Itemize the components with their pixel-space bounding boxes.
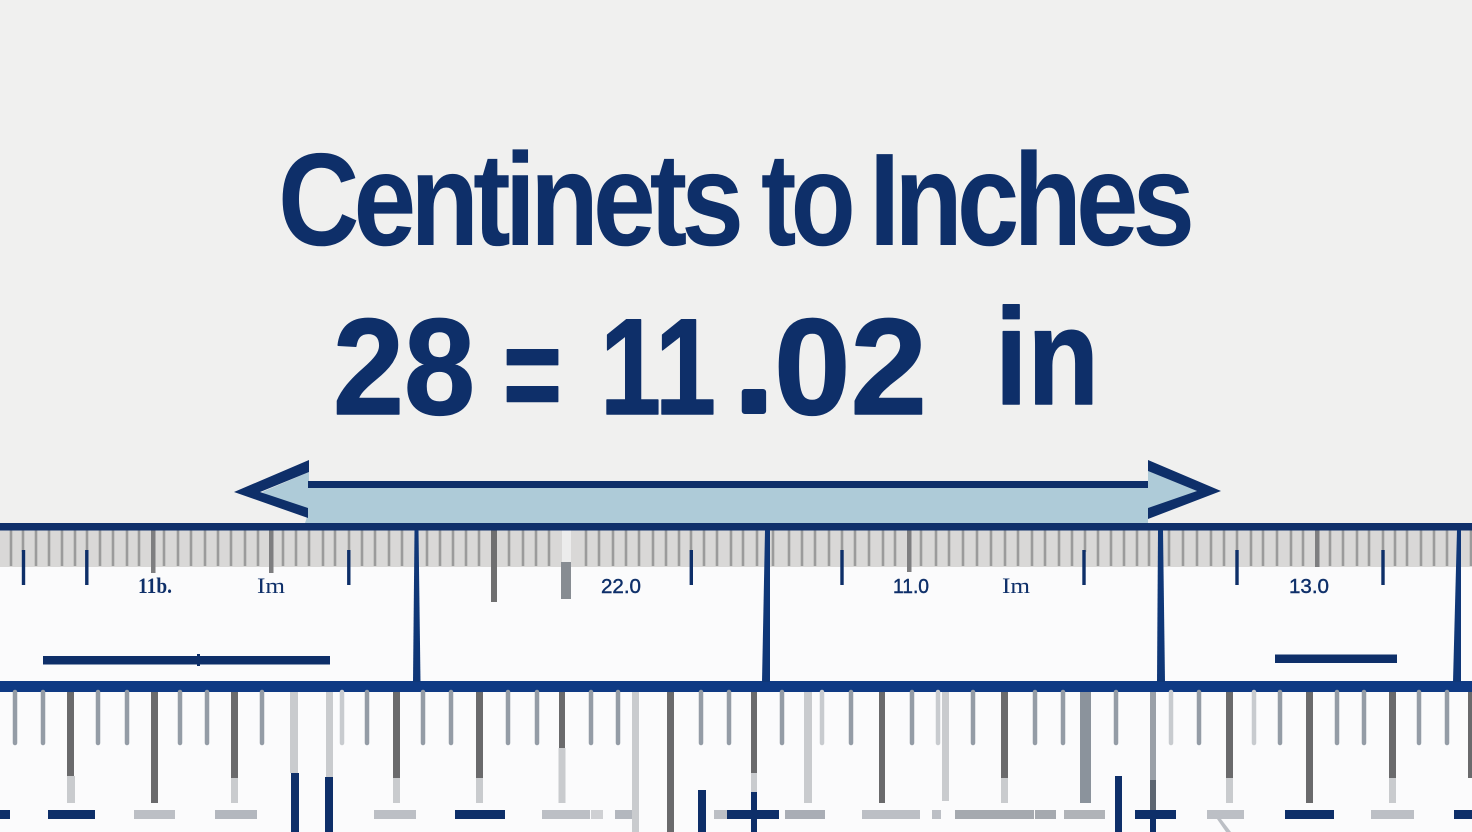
ruler labels: Im xyxy=(1002,573,1030,598)
lower scale: long pale graduations xyxy=(67,692,1396,832)
lower scale: pale short graduations xyxy=(342,692,1254,743)
ruler: major dividers xyxy=(413,530,1461,682)
conversion result: 11 xyxy=(600,291,716,444)
conversion result: 02 xyxy=(774,291,927,444)
lower scale: short graduations xyxy=(15,692,1447,743)
lower scale: wide gray graduations xyxy=(1080,692,1156,812)
ruler labels: 11.0 xyxy=(893,576,929,598)
ruler: short navy marks xyxy=(24,550,1383,585)
ruler: top and mid rails xyxy=(0,523,1472,692)
title: Inches xyxy=(869,126,1190,273)
lower scale: pale dashes xyxy=(134,810,1414,819)
ruler labels: Im xyxy=(257,573,285,598)
ruler labels: 22.0 xyxy=(601,576,641,598)
lower scale: navy dashes, crosses and stems xyxy=(0,773,1472,832)
ruler: medium graduations xyxy=(151,530,1320,602)
conversion result: 28 xyxy=(333,291,475,444)
ruler labels: 13.0 xyxy=(1289,576,1329,598)
double-headed arrow xyxy=(234,460,1221,523)
conversion result: . xyxy=(736,296,772,439)
title: to xyxy=(761,126,852,273)
ruler labels xyxy=(138,573,1329,598)
conversion result xyxy=(333,281,1099,451)
ruler: upper body xyxy=(0,530,1472,832)
title: Centinets xyxy=(278,126,739,273)
ruler: fine graduations xyxy=(11,530,1471,566)
ruler labels: 11b. xyxy=(138,573,172,598)
lower scale: dark graduations xyxy=(67,692,1472,832)
diagonal pale stroke xyxy=(1217,819,1231,832)
ruler: horizontal bars xyxy=(43,654,1397,666)
conversion result: = xyxy=(503,298,562,451)
conversion result: in xyxy=(995,281,1099,434)
title xyxy=(278,126,1190,273)
